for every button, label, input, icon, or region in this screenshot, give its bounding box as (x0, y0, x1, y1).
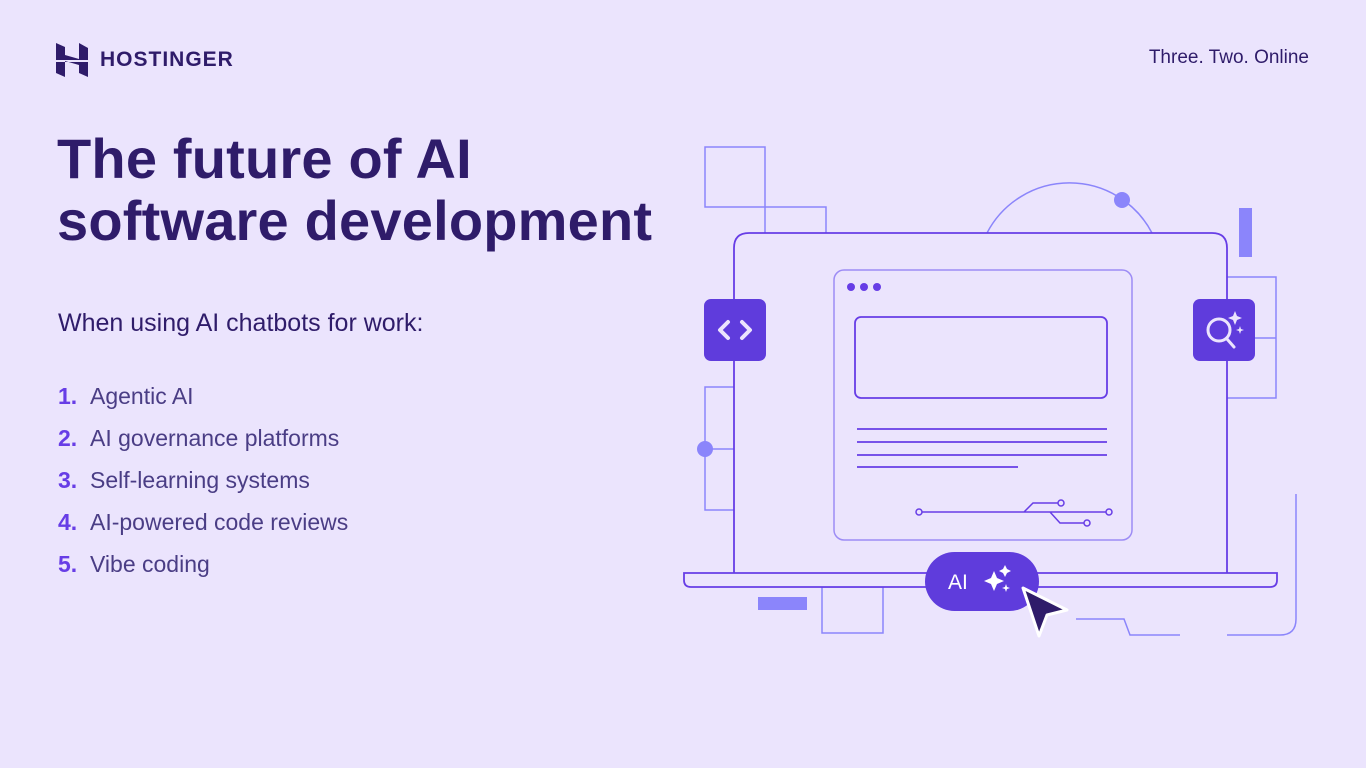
subtitle: When using AI chatbots for work: (58, 309, 423, 337)
title: software development (57, 189, 652, 252)
title (57, 127, 652, 252)
tagline: Three. Two. Online (1149, 47, 1309, 68)
list (58, 383, 348, 577)
list: 1. (58, 383, 77, 409)
AI button: AI (948, 571, 968, 594)
list: 2. (58, 425, 77, 451)
logo (56, 43, 234, 77)
list: AI-powered code reviews (90, 509, 348, 535)
icon: code (704, 299, 766, 361)
list: AI governance platforms (90, 425, 339, 451)
list: Self-learning systems (90, 467, 310, 493)
icon: search sparkle (1193, 299, 1255, 361)
title: The future of AI (57, 127, 472, 190)
logo: HOSTINGER (100, 48, 234, 71)
list: 3. (58, 467, 77, 493)
list: 5. (58, 551, 77, 577)
list: Vibe coding (90, 551, 210, 577)
list: Agentic AI (90, 383, 194, 409)
cursor (1023, 588, 1067, 636)
list: 4. (58, 509, 77, 535)
AI button (925, 552, 1039, 611)
browser window (834, 270, 1132, 540)
